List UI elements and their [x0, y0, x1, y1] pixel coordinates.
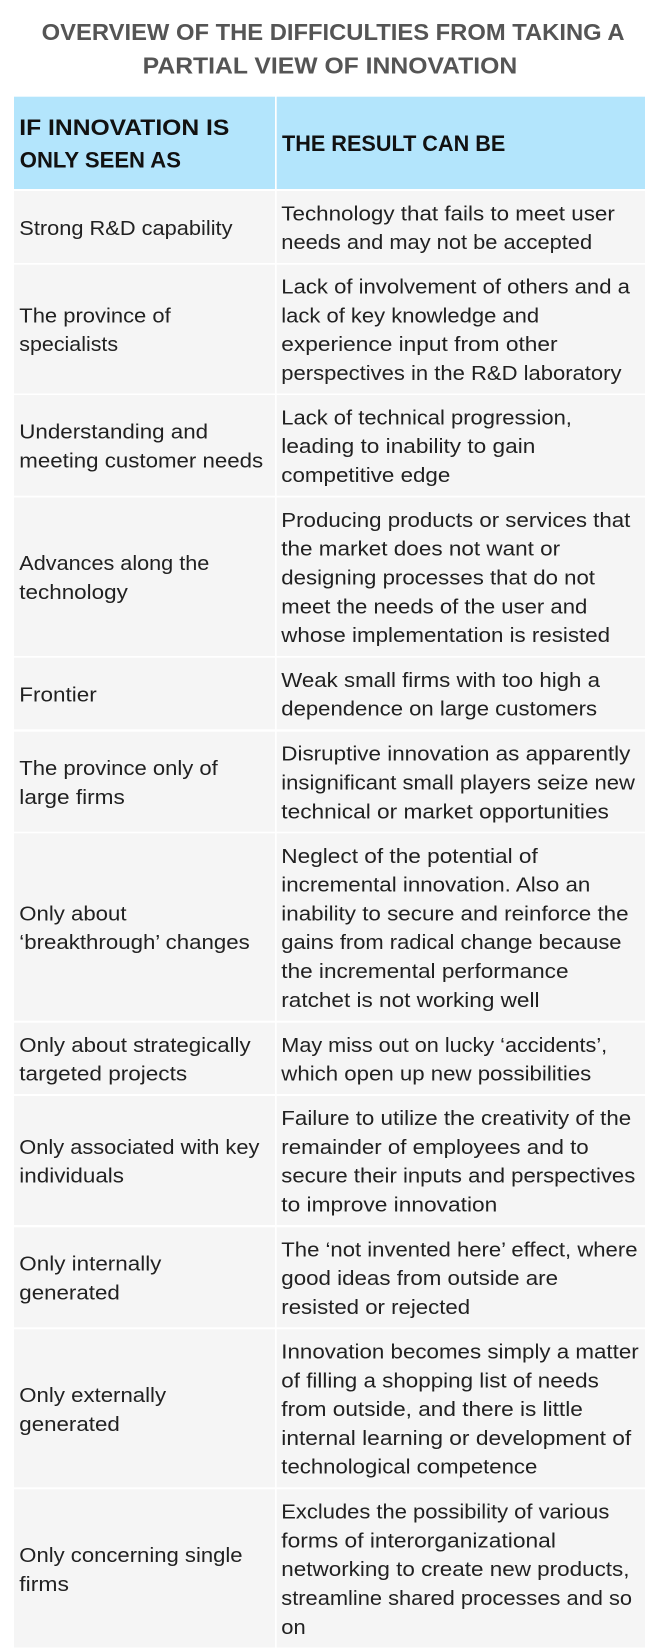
row: understanding customer needs: competitive edge [281, 464, 450, 487]
row: internally generated: Only internally [19, 1253, 162, 1276]
row: externally generated: generated [19, 1413, 120, 1436]
row: externally generated: technological competence [281, 1456, 537, 1479]
row: single firms: Only concerning single [19, 1544, 243, 1567]
row: breakthrough changes: Only about [19, 902, 127, 925]
header row: IF INNOVATION IS [19, 115, 229, 140]
row: internally generated [14, 1227, 645, 1327]
row: single firms [14, 1489, 645, 1648]
row: province of specialists: lack of key knowledge and [281, 304, 539, 327]
row: frontier: Frontier [19, 683, 97, 706]
row: advances along the technology: technology [19, 581, 129, 604]
title: OVERVIEW OF THE DIFFICULTIES FROM TAKING A [42, 19, 624, 45]
row: strategically targeted projects: targeted projects [19, 1063, 187, 1086]
row: breakthrough changes: ratchet is not working well [281, 989, 540, 1012]
row: strategically targeted projects [14, 1023, 645, 1094]
row: province of specialists: The province of [19, 304, 171, 327]
row: province of specialists: experience input from other [281, 333, 558, 356]
row: single firms: on [281, 1616, 306, 1639]
row: strategically targeted projects: May miss out on lucky ‘accidents’, [281, 1034, 607, 1057]
row: frontier [14, 658, 645, 729]
row: advances along the technology: whose implementation is resisted [280, 624, 610, 647]
row: single firms: forms of interorganizational [281, 1529, 556, 1552]
row: understanding customer needs [14, 395, 645, 496]
row: strong R&D capability: Technology that fails to meet user [281, 202, 615, 225]
row: frontier: Weak small firms with too high a [281, 669, 601, 692]
row: externally generated: from outside, and there is little [281, 1398, 583, 1421]
row: advances along the technology: Advances along the [19, 552, 209, 575]
row: single firms: streamline shared processes and so [281, 1587, 632, 1610]
row: advances along the technology: designing processes that do not [281, 566, 595, 590]
row: externally generated: Only externally [19, 1384, 167, 1407]
row: externally generated: internal learning or development of [281, 1427, 632, 1450]
title: PARTIAL VIEW OF INNOVATION [143, 52, 517, 78]
row: breakthrough changes [14, 833, 645, 1021]
row: key individuals: Only associated with key [19, 1136, 260, 1159]
row: key individuals: secure their inputs and perspectives [281, 1165, 635, 1188]
row: externally generated: of filling a shopping list of needs [281, 1369, 599, 1392]
title [42, 19, 624, 78]
row: internally generated: The ‘not invented here’ effect, where [281, 1238, 638, 1261]
row: single firms: networking to create new products, [281, 1558, 630, 1581]
row: province only of large firms: insignificant small players seize new [281, 772, 635, 794]
row: province only of large firms: technical or market opportunities [281, 800, 609, 823]
row: understanding customer needs: Understanding and [19, 421, 208, 444]
row: province of specialists: Lack of involvement of others and a [281, 276, 631, 299]
row: breakthrough changes: inability to secure and reinforce the [281, 902, 629, 925]
row: breakthrough changes: gains from radical change because [281, 931, 622, 954]
row: advances along the technology: meet the needs of the user and [281, 595, 587, 618]
row: key individuals: remainder of employees and to [281, 1136, 589, 1159]
row: key individuals: Failure to utilize the creativity of the [281, 1107, 631, 1130]
row: province only of large firms: large firms [19, 786, 125, 809]
row: frontier: dependence on large customers [281, 698, 597, 721]
row: single firms: Excludes the possibility of various [281, 1501, 609, 1524]
row: strong R&D capability: needs and may not be accepted [281, 231, 592, 254]
row: internally generated: generated [19, 1282, 120, 1304]
row: breakthrough changes: incremental innovation. Also an [281, 874, 590, 897]
header row: THE RESULT CAN BE [282, 131, 505, 156]
row: advances along the technology: the market does not want or [281, 538, 560, 561]
row: breakthrough changes: ‘breakthrough’ changes [19, 931, 250, 954]
row: understanding customer needs: meeting customer needs [19, 450, 263, 472]
row: key individuals: to improve innovation [281, 1194, 497, 1216]
row: externally generated [14, 1329, 645, 1487]
row: province of specialists [14, 265, 645, 394]
row: advances along the technology: Producing products or services that [281, 509, 631, 532]
row: understanding customer needs: leading to inability to gain [281, 435, 535, 458]
row: province of specialists: specialists [19, 333, 118, 356]
row: province only of large firms [14, 732, 645, 832]
row: strategically targeted projects: which open up new possibilities [280, 1063, 591, 1086]
row: province only of large firms: The province only of [19, 757, 218, 780]
row: internally generated: good ideas from outside are [281, 1267, 558, 1290]
row: strong R&D capability: Strong R&D capability [19, 217, 233, 240]
row: province only of large firms: Disruptive innovation as apparently [281, 743, 631, 766]
row: breakthrough changes: the incremental performance [281, 960, 568, 983]
row: single firms: firms [19, 1573, 69, 1596]
row: externally generated: Innovation becomes simply a matter [281, 1340, 639, 1364]
row: breakthrough changes: Neglect of the potential of [281, 845, 538, 868]
row: province of specialists: perspectives in the R&D laboratory [281, 362, 622, 385]
header row [14, 97, 645, 189]
row: key individuals: individuals [19, 1165, 124, 1188]
row: understanding customer needs: Lack of technical progression, [281, 406, 572, 429]
row: internally generated: resisted or rejected [281, 1296, 470, 1319]
row: key individuals [14, 1096, 645, 1225]
row: strategically targeted projects: Only about strategically [19, 1034, 251, 1057]
row: strong R&D capability [14, 191, 645, 263]
row: advances along the technology [14, 498, 645, 656]
header row: ONLY SEEN AS [20, 147, 181, 172]
